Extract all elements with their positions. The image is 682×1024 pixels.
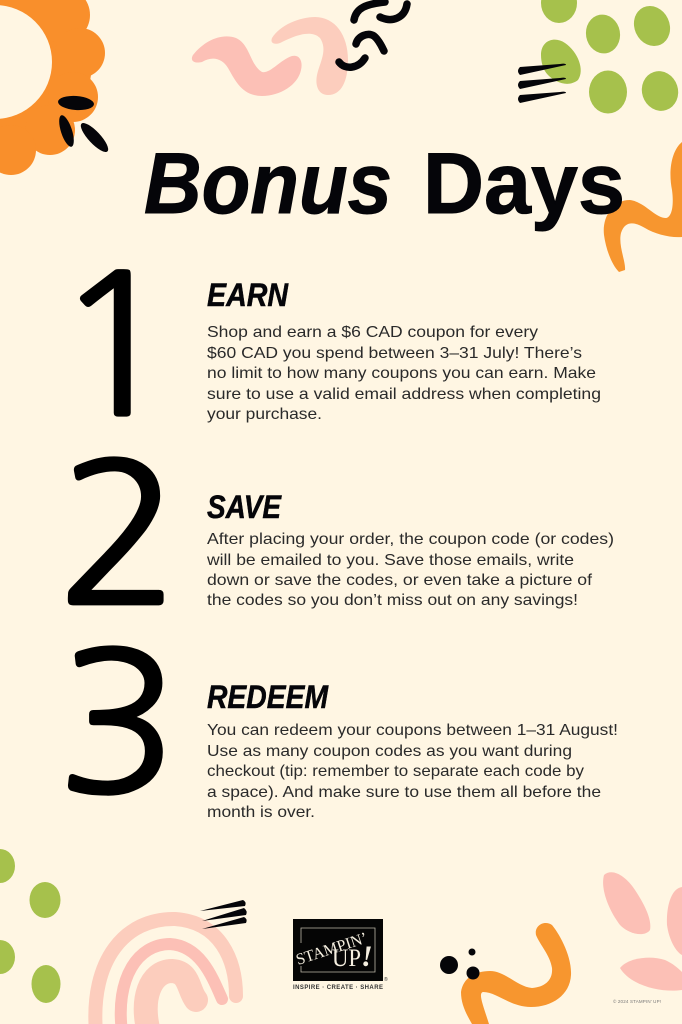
logo: Stampin' Up!: ! bbox=[361, 940, 373, 973]
title: Bonus bbox=[144, 136, 392, 232]
icon: black dots bbox=[440, 948, 480, 980]
logo: Stampin' Up!: UP bbox=[332, 945, 361, 972]
logo: Stampin' Up!: INSPIRE · CREATE · SHARE bbox=[293, 985, 383, 991]
text block: earn bbox=[207, 324, 601, 423]
icon: black squiggles bbox=[339, 2, 407, 67]
section: redeem bbox=[207, 679, 618, 821]
text block: earn: $60 CAD you spend between 3–31 July! There’s bbox=[207, 345, 582, 362]
logo: Stampin' Up! bbox=[293, 919, 388, 991]
text block: earn: no limit to how many coupons you can earn. Make bbox=[207, 365, 596, 382]
text block: save: After placing your order, the coupon code (or codes) bbox=[207, 531, 614, 548]
text block: save: the codes so you don’t miss out on any savings! bbox=[207, 592, 578, 609]
text block: save: down or save the codes, or even take a picture of bbox=[207, 572, 593, 589]
text block: earn: sure to use a valid email address when completing bbox=[207, 386, 601, 403]
icon: pink rainbow bbox=[95, 919, 236, 1024]
heading: save: SAVE bbox=[207, 489, 282, 525]
title bbox=[144, 136, 625, 232]
number 2: 2 bbox=[57, 438, 181, 631]
text block: redeem: checkout (tip: remember to separate each code by bbox=[207, 763, 584, 780]
text block: redeem: a space). And make sure to use them all before the bbox=[207, 784, 601, 801]
text block: redeem: You can redeem your coupons between 1–31 August! bbox=[207, 722, 618, 739]
number 3: 3 bbox=[57, 627, 179, 820]
icon: orange squiggle bottom bbox=[461, 923, 571, 1024]
icon: green dots top bbox=[541, 0, 682, 116]
number 1: 1 bbox=[50, 249, 180, 444]
icon: black dashes top bbox=[518, 64, 566, 103]
icon: pink leaves bbox=[603, 872, 682, 991]
text block: save bbox=[206, 531, 614, 609]
icon: orange sun bbox=[0, 0, 112, 175]
copyright: © 2024 STAMPIN’ UP! bbox=[613, 998, 661, 1004]
heading: earn: EARN bbox=[207, 277, 289, 313]
text block: earn: your purchase. bbox=[207, 406, 322, 423]
heading: redeem: REDEEM bbox=[207, 679, 329, 715]
icon: pink squiggles bbox=[192, 17, 348, 96]
icon: orange squiggle right bbox=[604, 142, 682, 272]
text block: redeem: month is over. bbox=[207, 804, 315, 821]
text block: redeem: Use as many coupon codes as you want during bbox=[207, 743, 572, 760]
icon: black dashes bottom bbox=[200, 900, 247, 929]
logo: Stampin' Up!: ® bbox=[384, 976, 388, 983]
logo: Stampin' Up!: STAMPIN’ bbox=[294, 930, 370, 969]
text block: save: will be emailed to you. Save those emails, write bbox=[206, 552, 574, 569]
text block: earn: Shop and earn a $6 CAD coupon for every bbox=[207, 324, 538, 341]
title: Days bbox=[423, 136, 625, 232]
section: save bbox=[206, 489, 614, 609]
icon: green dots bottom left bbox=[0, 849, 60, 1003]
section: earn bbox=[207, 277, 601, 423]
text block: redeem bbox=[207, 722, 618, 821]
